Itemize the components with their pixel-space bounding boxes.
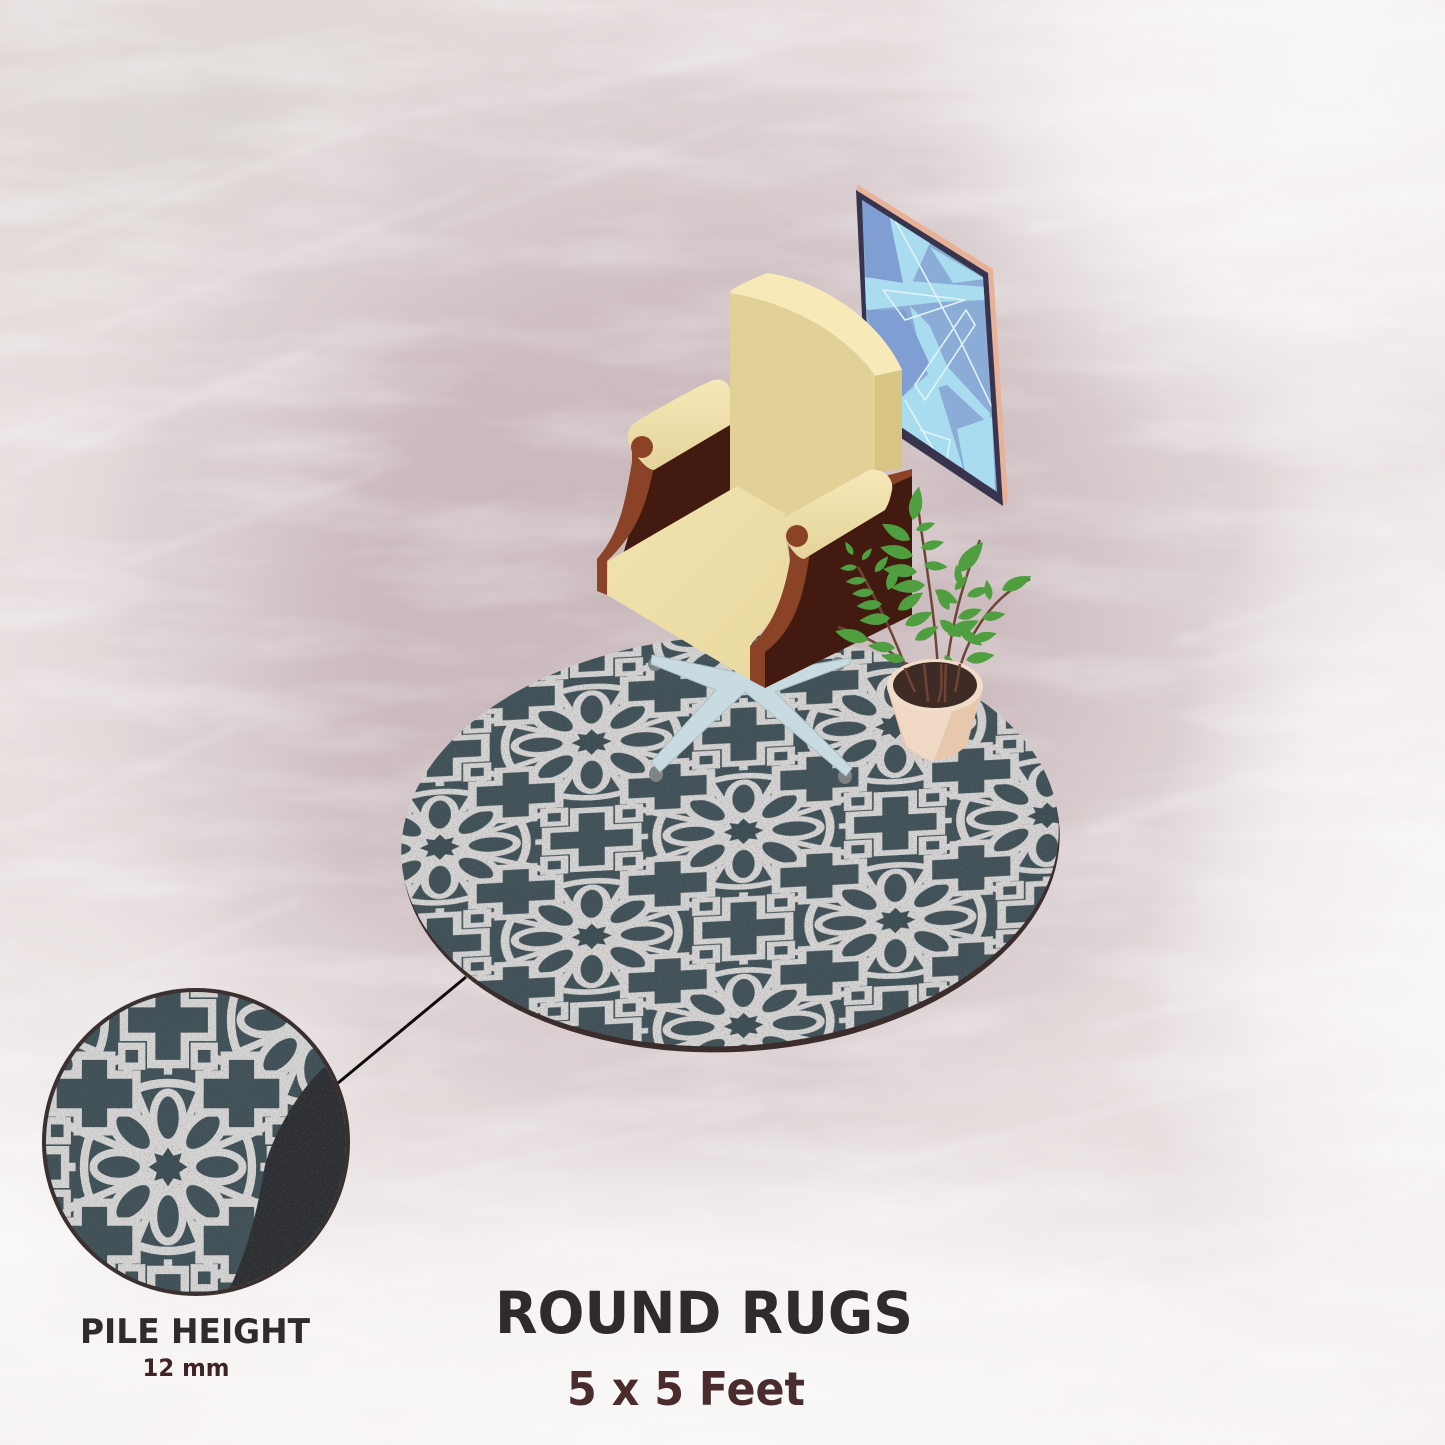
armchair bbox=[597, 273, 912, 784]
size subtitle: 5 x 5 Feet bbox=[567, 1362, 805, 1416]
left arm wood bbox=[597, 440, 655, 595]
pile height value: 12 mm bbox=[142, 1354, 230, 1382]
title: ROUND RUGS bbox=[495, 1279, 913, 1347]
right arm wood bbox=[750, 525, 810, 688]
right arm roll bbox=[782, 470, 892, 559]
wall window / mirror bbox=[856, 185, 1008, 506]
round rug bbox=[401, 636, 1060, 1052]
left armrest panel bbox=[623, 425, 730, 555]
potted plant bbox=[833, 485, 1034, 761]
chair back bbox=[730, 273, 902, 560]
plant pot bbox=[887, 659, 983, 761]
pile height label: PILE HEIGHT bbox=[80, 1312, 311, 1352]
left arm roll bbox=[628, 380, 730, 470]
magnified pile detail circle bbox=[40, 985, 360, 1300]
seat bbox=[607, 486, 790, 680]
right wood strip top bbox=[885, 469, 912, 486]
right side panel bbox=[765, 470, 912, 688]
chair swivel base bbox=[648, 655, 852, 784]
plant stems bbox=[838, 500, 1030, 702]
plant leaves bbox=[833, 485, 1034, 675]
connector line from rug to magnifier bbox=[338, 977, 466, 1083]
